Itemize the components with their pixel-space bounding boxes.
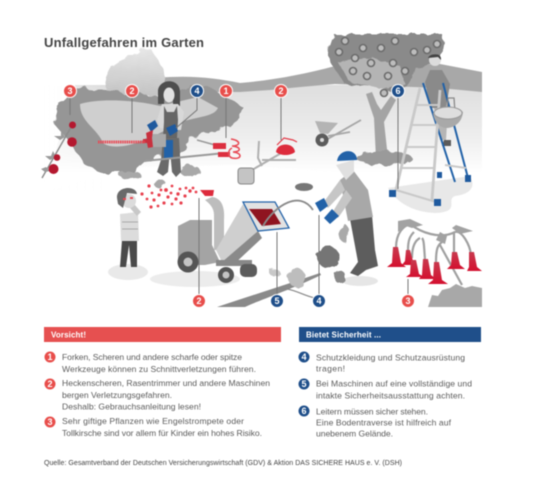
title: Unfallgefahren im Garten [44, 35, 204, 50]
person on ladder with basket [425, 54, 451, 146]
hedge trimmer [98, 130, 166, 148]
item 2: bergen Verletzungsgefahren. [62, 390, 172, 400]
item 3: 3 [47, 417, 53, 427]
callout marker 2: 2 [129, 86, 135, 96]
boy [108, 188, 148, 280]
item 2: Heckenscheren, Rasentrimmer und andere Maschinen [62, 378, 270, 388]
item 1: Forken, Scheren und andere scharfe oder spitze [62, 352, 242, 362]
horizon band [157, 64, 482, 92]
item 4: Schutzkleidung und Schutzausrüstung [316, 352, 465, 362]
item 5: intakte Sicherheitsausstattung achten. [316, 390, 465, 400]
foreground shrub [428, 284, 482, 307]
item 5 [298, 378, 472, 400]
poisonous berries on branch [41, 122, 77, 178]
callout marker 3 plant [402, 294, 414, 308]
callout marker 3 plant: 3 [405, 296, 411, 306]
item 5: 5 [301, 379, 307, 389]
callout leader lines [70, 98, 408, 294]
item 4 [298, 352, 465, 374]
callout marker 4 gloves: 4 [316, 296, 322, 306]
item 2: Deshalb: Gebrauchsanleitung lesen! [62, 402, 201, 412]
callout marker 2 chipper [192, 294, 206, 308]
callout marker 2 trimmer: 2 [278, 86, 284, 96]
hedge [54, 84, 242, 174]
item 6: 6 [301, 406, 307, 416]
source line: Quelle: Gesamtverband der Deutschen Versicherungswirtschaft (GDV) & Aktion DAS SICHERE HAUS e. V. (DSH) [44, 460, 402, 467]
apple basket [433, 107, 463, 128]
leaf clippings on lawn [119, 165, 200, 188]
item 3: Sehr giftige Pflanzen wie Engelstrompete oder [62, 416, 244, 426]
item 1: 1 [47, 352, 53, 362]
angel's trumpet plant [387, 219, 482, 285]
flying chips red dots [140, 184, 197, 209]
item 6: unebenem Gelände. [316, 428, 393, 438]
callout marker 4: 4 [194, 86, 200, 96]
callout marker 4 gloves [312, 294, 326, 308]
apple tree [328, 34, 444, 165]
item 3 [44, 416, 262, 438]
item 2 [44, 378, 270, 412]
callout marker 1: 1 [223, 86, 229, 96]
callout marker 2 trimmer [274, 84, 288, 98]
ladder [389, 83, 471, 206]
callout marker 1 [220, 84, 232, 98]
callout marker 6 [392, 84, 404, 98]
background tree [105, 47, 165, 95]
item 6: Eine Bodentraverse ist hilfreich auf [316, 418, 452, 428]
ladder shadow [388, 176, 472, 213]
callout marker 2 [126, 84, 138, 98]
item 5: Bei Maschinen auf eine vollständige und [316, 378, 472, 388]
cut branches and leaves [217, 224, 349, 307]
heading bar: Bietet Sicherheit: Bietet Sicherheit ... [306, 330, 381, 340]
heading bar: Bietet Sicherheit [299, 327, 481, 342]
panel: Bietet Sicherheit [298, 327, 481, 438]
item 6 [298, 406, 452, 438]
item 6: Leitern müssen sicher stehen. [316, 406, 428, 416]
person with hedge trimmer [147, 81, 184, 177]
lawn trimmer [238, 138, 297, 184]
callout marker 6: 6 [395, 86, 401, 96]
gardener with helmet [315, 151, 378, 286]
item 1 [44, 352, 256, 374]
garden tools: forks and shears [144, 139, 240, 161]
item 1: Werkzeuge können zu Schnittverletzungen führen. [62, 364, 256, 374]
item 4: 4 [301, 352, 307, 362]
garden scene illustration [41, 34, 482, 307]
item 3: Tollkirsche sind vor allem für Kinder ein hohes Risiko. [62, 428, 262, 438]
callout marker 5: 5 [274, 296, 280, 306]
item 2: 2 [47, 379, 53, 389]
callout marker 4 [190, 84, 204, 98]
heading bar: Vorsicht [44, 327, 281, 342]
callout marker 5 [270, 294, 284, 308]
item 4: tragen! [316, 364, 345, 374]
heading bar: Vorsicht: Vorsicht! [51, 330, 86, 340]
callout marker 3: 3 [67, 86, 73, 96]
lawn background [42, 85, 482, 191]
callout marker 3 [64, 84, 76, 98]
wheelbarrow [315, 120, 361, 146]
callout marker 2 chipper: 2 [196, 296, 202, 306]
panel: Vorsicht [44, 327, 281, 438]
wood chipper [150, 183, 313, 287]
